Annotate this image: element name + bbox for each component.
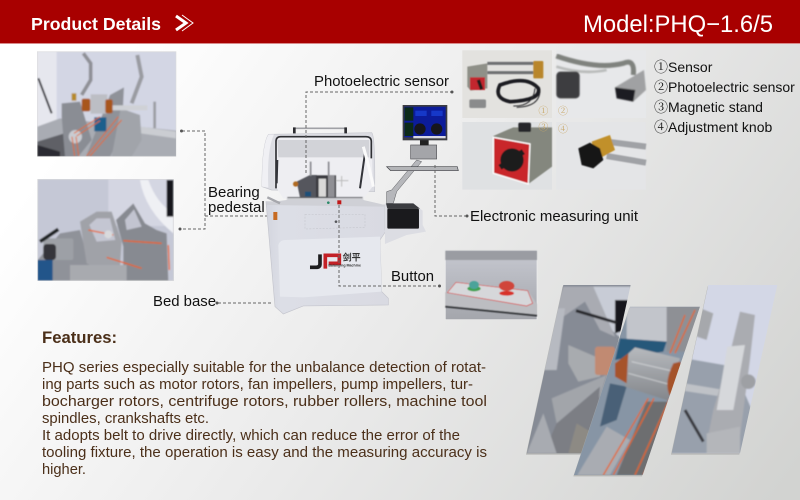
features text: higher. — [42, 462, 86, 478]
dots: bearing pedestal leader — [178, 130, 183, 230]
dot: button leader — [438, 284, 441, 288]
features text: ing parts such as motor rotors, fan impellers, pump impellers, tur- — [42, 377, 473, 393]
photo 3: magnetic stand: ③ — [538, 120, 548, 134]
photo 1: sensor kit — [462, 50, 552, 118]
panel: right slice — [667, 283, 780, 457]
icon: double chevron — [176, 15, 193, 31]
model title: Model:PHQ−1.6/5 — [583, 11, 773, 38]
label: button: Button — [391, 268, 434, 285]
panel: centre slice — [574, 306, 700, 476]
header band — [0, 0, 800, 44]
slanted photo strip: rotor close-up — [520, 283, 780, 478]
dot: bed base leader — [216, 302, 218, 304]
photo: rotor on bearing pedestals — [37, 51, 177, 157]
parts legend: Adjustment knob — [668, 119, 772, 135]
machine — [262, 105, 458, 314]
support arm — [387, 160, 422, 203]
logo — [310, 251, 361, 269]
features heading: Features: — [42, 328, 117, 347]
dot: electronic measuring unit leader — [466, 214, 468, 218]
parts legend: ② — [654, 77, 668, 97]
heading: product details: Product Details — [31, 14, 161, 34]
parts legend: Photoelectric sensor — [668, 79, 795, 95]
logo: Balancing Machine — [328, 264, 361, 268]
features text: bocharger rotors, centrifuge rotors, rubber rollers, machine tool — [42, 394, 487, 410]
printer box — [385, 203, 426, 244]
features text: It adopts belt to drive directly, which can reduce the error of the — [42, 428, 460, 444]
features text — [42, 360, 487, 478]
photo 3: magnetic stand — [462, 120, 552, 190]
label: electronic measuring unit: Electronic measuring unit — [470, 208, 639, 225]
dashed leader: photoelectric sensor — [306, 92, 451, 173]
dashed leader: button — [339, 205, 438, 286]
photo 2: photoelectric connector: ② — [558, 103, 568, 117]
label: bearing pedestal: Bearing — [208, 184, 260, 201]
dashed leader: bearing pedestal — [182, 131, 305, 229]
label: photoelectric sensor: Photoelectric sensor — [314, 73, 449, 90]
features text: spindles, crankshafts etc. — [42, 411, 209, 427]
dashed leader: electronic measuring unit — [435, 165, 466, 216]
photo 1: sensor kit: ① — [538, 103, 548, 117]
dashed leader: bed base — [218, 302, 272, 304]
photo: control buttons — [445, 251, 537, 320]
shelf — [387, 167, 458, 171]
features text: PHQ series especially suitable for the unbalance detection of rotat- — [42, 360, 486, 376]
photo 4: adjustment knob — [556, 122, 646, 190]
features text: tooling fixture, the operation is easy and the measuring accuracy is — [42, 445, 487, 461]
dot: photoelectric sensor leader — [450, 90, 454, 94]
photo grid: sensor components — [462, 50, 646, 190]
balancing assembly inside lid — [287, 162, 363, 204]
label: bed base: Bed base — [153, 293, 216, 310]
parts legend: ①Sensor — [654, 57, 712, 77]
panel: left slice — [526, 285, 630, 455]
monitor — [403, 105, 447, 159]
parts legend: ④ — [654, 117, 668, 137]
photo 4: adjustment knob: ④ — [558, 122, 568, 136]
label: bearing pedestal: pedestal — [208, 199, 265, 216]
photo 2: photoelectric connector — [556, 50, 646, 118]
parts legend: ③ — [654, 97, 668, 117]
lid — [262, 127, 375, 198]
logo: 剑平 — [343, 251, 361, 262]
machine cabinet — [266, 202, 388, 314]
photo: bearing pedestal with motor — [37, 179, 174, 281]
parts legend: Magnetic stand — [668, 99, 763, 115]
